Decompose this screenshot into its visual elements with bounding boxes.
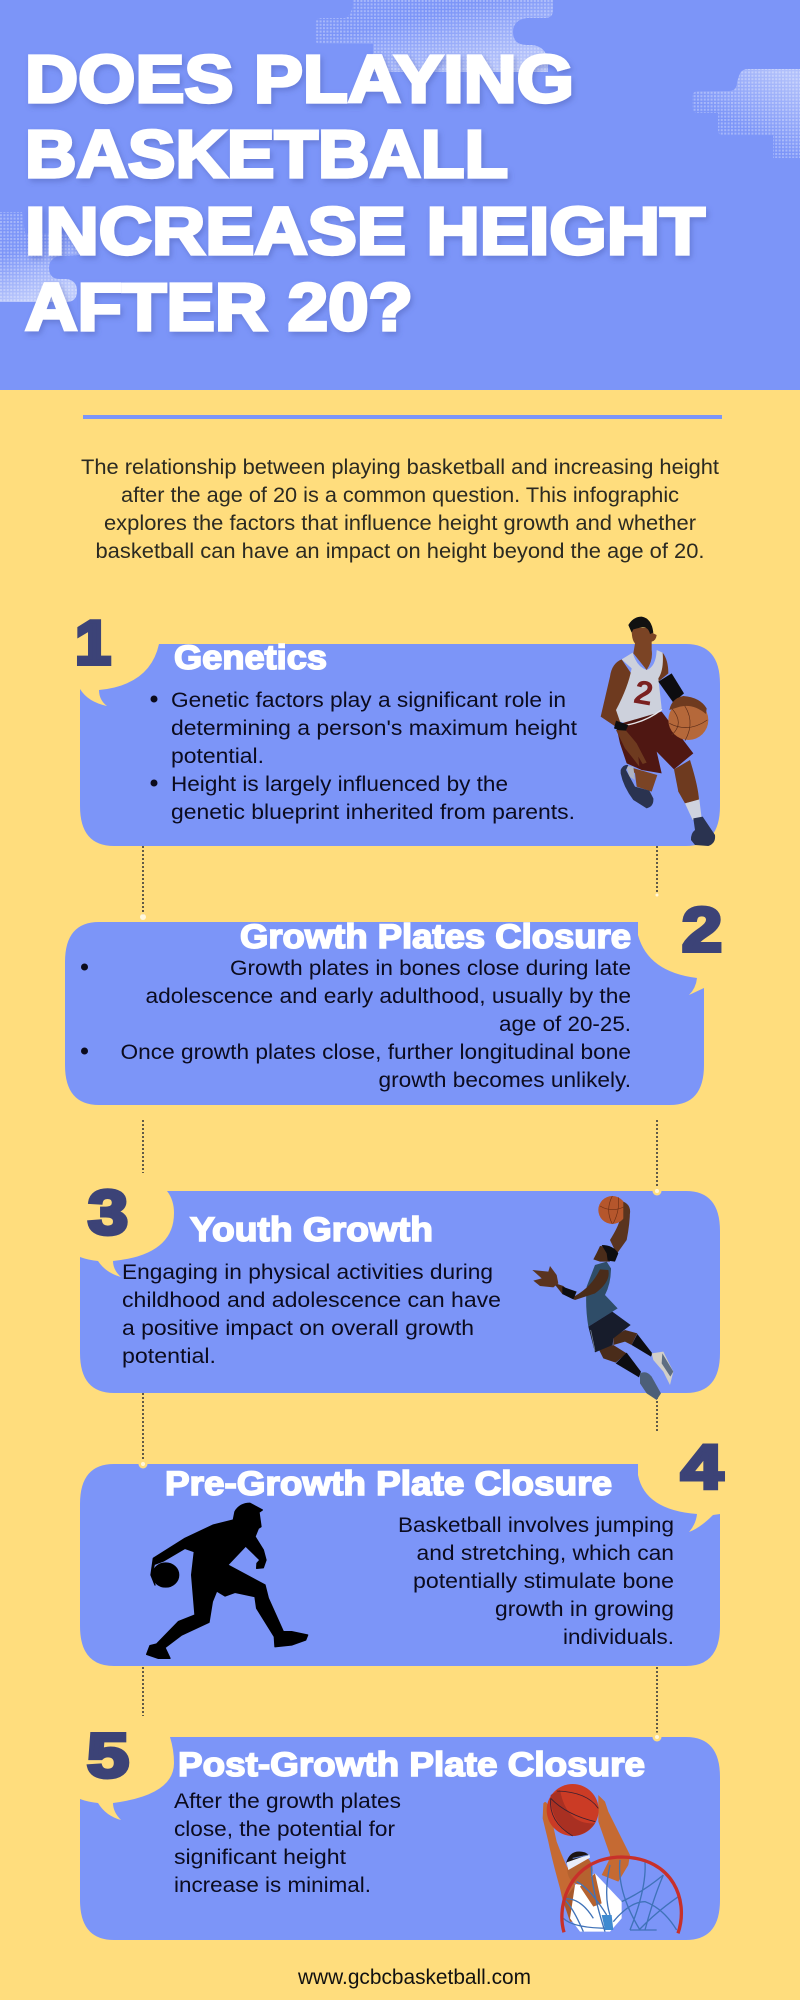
number 5: 5 <box>87 1722 129 1791</box>
bullet list: Genetic factors play a significant role in <box>171 689 566 712</box>
panel 5: post-growth plate closure <box>80 1722 720 1940</box>
header band <box>0 0 800 390</box>
body text: potential. <box>122 1345 216 1368</box>
card shape 4 <box>80 1464 720 1666</box>
bullet list: potential. <box>171 745 264 768</box>
intro text: after the age of 20 is a common question. This infographic <box>121 484 679 507</box>
body text <box>122 1261 501 1368</box>
heading: post-growth plate closure: Post-Growth Plate Closure <box>178 1746 645 1784</box>
title: DOES PLAYING <box>25 42 574 117</box>
texture cloud: left <box>0 212 79 302</box>
number 2: 2 <box>682 896 722 965</box>
bullet list: determining a person's maximum height <box>171 717 577 740</box>
card shape 2 <box>65 922 704 1105</box>
heading: youth growth: Youth Growth <box>190 1211 433 1249</box>
title: BASKETBALL <box>25 117 508 192</box>
panel 3: youth growth <box>80 1179 720 1400</box>
body text: Basketball involves jumping <box>398 1514 674 1537</box>
body text: a positive impact on overall growth <box>122 1317 474 1340</box>
body text: close, the potential for <box>174 1818 395 1841</box>
body text: growth in growing <box>495 1598 674 1621</box>
card shape 3 <box>80 1191 720 1393</box>
bullet list: Once growth plates close, further longitudinal bone <box>120 1041 631 1064</box>
heading: growth plates closure: Growth Plates Closure <box>240 918 631 956</box>
bullet list: Height is largely influenced by the <box>171 773 508 796</box>
body text: childhood and adolescence can have <box>122 1289 501 1312</box>
number 1: 1 <box>75 609 111 678</box>
card shape 1 <box>80 644 720 846</box>
panel 4: pre-growth plate closure <box>80 1433 724 1666</box>
heading: genetics: Genetics <box>174 639 327 677</box>
intro text: The relationship between playing basketball and increasing height <box>81 456 719 479</box>
texture cloud: top <box>315 0 553 72</box>
illustration: player silhouette <box>147 1503 308 1658</box>
card shape 5 <box>80 1737 720 1940</box>
body text: Engaging in physical activities during <box>122 1261 493 1284</box>
bullet list: adolescence and early adulthood, usually by the <box>146 985 631 1008</box>
dotted connectors <box>140 846 658 1737</box>
illustration: dribbling player <box>601 617 715 846</box>
number 4: 4 <box>681 1433 724 1502</box>
panel 1: genetics <box>75 609 720 846</box>
number 3: 3 <box>88 1179 128 1248</box>
bullet list: age of 20-25. <box>499 1013 631 1036</box>
title: INCREASE HEIGHT <box>25 194 705 269</box>
body text: increase is minimal. <box>174 1874 371 1897</box>
illustration: dunking player <box>532 1196 673 1400</box>
bullet list: Growth plates in bones close during late <box>230 957 631 980</box>
panel 2: growth plates closure <box>65 896 722 1105</box>
connector end dots <box>138 1186 662 1742</box>
illustration: player dunking through hoop <box>543 1784 681 1933</box>
title: AFTER 20? <box>25 270 413 345</box>
website footer: www.gcbcbasketball.com <box>297 1966 531 1989</box>
body text: potentially stimulate bone <box>413 1570 674 1593</box>
intro text: basketball can have an impact on height beyond the age of 20. <box>96 540 704 563</box>
heading: pre-growth plate closure: Pre-Growth Plate Closure <box>165 1465 612 1503</box>
texture cloud: right <box>692 69 800 158</box>
intro text: explores the factors that influence height growth and whether <box>104 512 696 535</box>
body text: individuals. <box>563 1626 674 1649</box>
bullet list: genetic blueprint inherited from parents. <box>171 801 575 824</box>
bullet list <box>150 689 577 824</box>
body text <box>398 1514 674 1649</box>
illustration: dribbling player: 2 <box>631 674 656 713</box>
bullet list: growth becomes unlikely. <box>378 1069 631 1092</box>
body text: After the growth plates <box>174 1790 401 1813</box>
title <box>25 42 705 345</box>
body text <box>174 1790 401 1897</box>
body text: significant height <box>174 1846 346 1869</box>
divider bar <box>83 415 722 419</box>
bullet list <box>81 957 631 1092</box>
body text: and stretching, which can <box>416 1542 674 1565</box>
intro text <box>81 456 719 563</box>
